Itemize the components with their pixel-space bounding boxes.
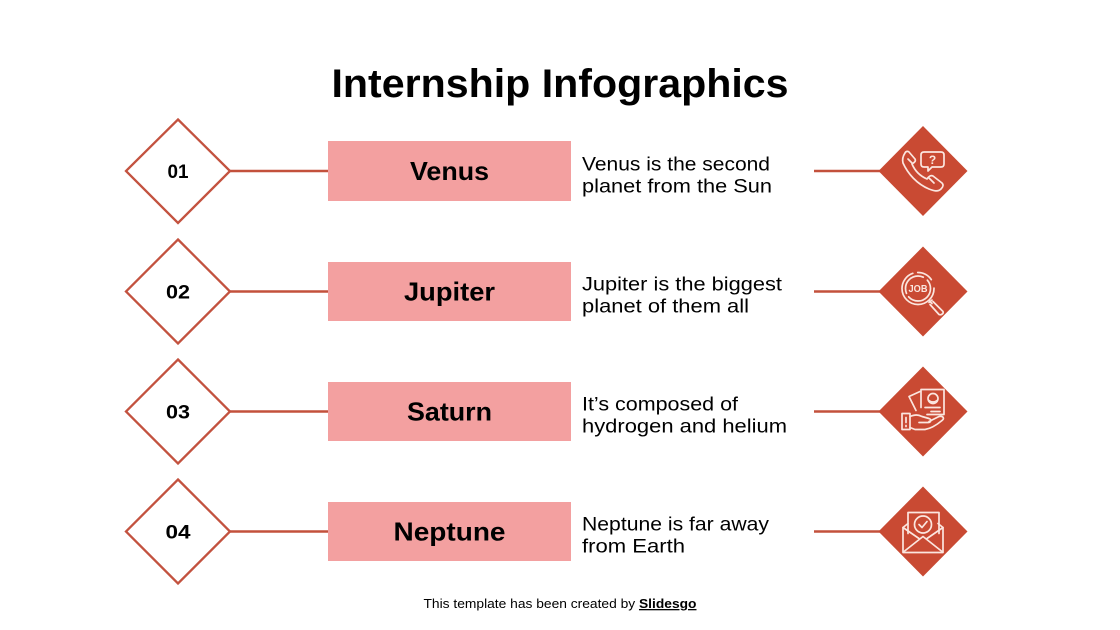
label bar Jupiter	[328, 262, 571, 321]
icon: envelope with check	[878, 486, 968, 576]
row 3: Saturn	[126, 360, 968, 464]
connector lines 3	[230, 410, 880, 413]
row 1: Venus	[126, 120, 968, 223]
description Venus: planet from the Sun	[582, 176, 772, 198]
title: Internship Infographics	[332, 62, 788, 106]
label bar Neptune: Neptune	[394, 516, 506, 546]
description Jupiter: Jupiter is the biggest	[582, 274, 783, 296]
connector lines 4	[230, 530, 880, 533]
connector lines 2	[230, 290, 880, 293]
icon: hand holding resume	[878, 366, 968, 456]
label bar Neptune	[328, 502, 571, 561]
label bar Venus: Venus	[410, 156, 489, 186]
number diamond 03	[126, 360, 230, 464]
number diamond 01: 01	[168, 162, 189, 183]
row 2: Jupiter	[126, 240, 968, 344]
row 4: Neptune	[126, 480, 968, 584]
description Saturn: It’s composed of	[582, 394, 739, 416]
number diamond 02	[126, 240, 230, 344]
description Venus: Venus is the second	[582, 154, 770, 176]
icon: phone with question bubble	[878, 126, 968, 216]
number diamond 01	[126, 120, 230, 223]
number diamond 03: 03	[166, 402, 190, 424]
number diamond 02: 02	[166, 282, 190, 304]
number diamond 04: 04	[166, 522, 191, 544]
icon: job magnifier: JOB	[908, 284, 928, 295]
description Saturn: hydrogen and helium	[582, 416, 787, 438]
label bar Saturn	[328, 382, 571, 441]
footer credit: This template has been created by Slidesgo	[424, 596, 697, 611]
icon: job magnifier	[878, 246, 968, 336]
description Neptune: Neptune is far away	[582, 514, 769, 536]
number diamond 04	[126, 480, 230, 584]
label bar Jupiter: Jupiter	[404, 276, 495, 306]
description Neptune: from Earth	[582, 536, 685, 558]
description Jupiter: planet of them all	[582, 296, 749, 318]
connector lines 1	[230, 170, 880, 172]
label bar Venus	[328, 141, 571, 201]
label bar Saturn: Saturn	[407, 396, 492, 426]
icon: phone with question bubble: ?	[929, 153, 936, 167]
